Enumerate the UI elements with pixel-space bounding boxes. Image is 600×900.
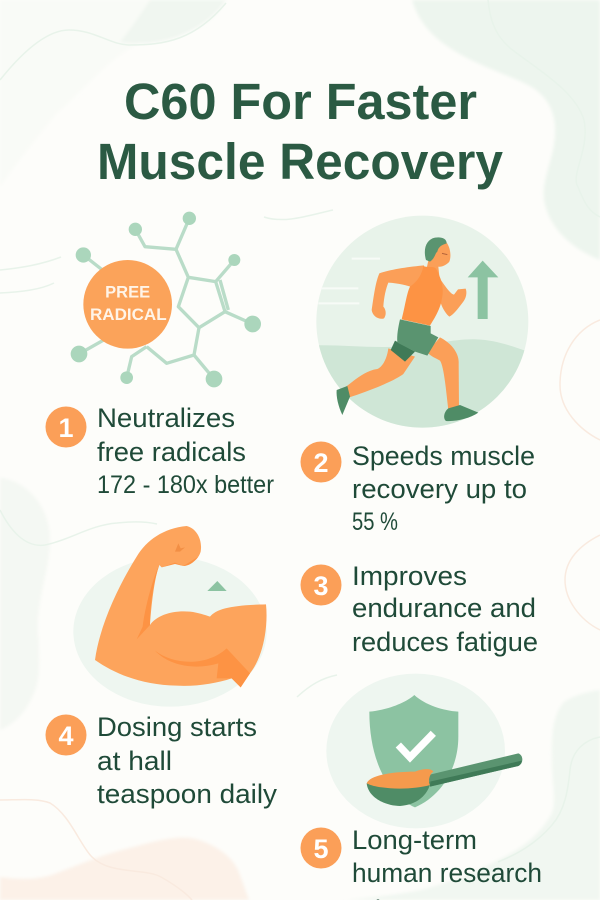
item 4: dosing: at hall [97, 746, 172, 776]
item 1: neutralizes free radicals: 1 [58, 413, 74, 443]
item 3: improves endurance: 3 [313, 571, 329, 601]
title: C60 For Faster [124, 73, 477, 130]
item 1: neutralizes free radicals: 172 - 180x better [97, 471, 274, 499]
item 3: improves endurance: reduces fatigue [352, 627, 538, 657]
title: Muscle Recovery [97, 133, 504, 190]
item 4: dosing: 4 [58, 721, 74, 751]
item 4: dosing: teaspoon daily [97, 779, 278, 809]
icon: runner [316, 216, 528, 428]
item 1: neutralizes free radicals: free radicals [97, 437, 246, 467]
icon: shield and spoon [326, 674, 522, 828]
icon: free radical molecule: PREE [105, 282, 150, 301]
item 5: long-term research: 5 [313, 834, 329, 864]
item 3: improves endurance: Improves [352, 561, 467, 591]
item 5: long-term research: human research [352, 858, 542, 888]
item 2: speeds muscle recovery: Speeds muscle [352, 441, 535, 471]
item 1: neutralizes free radicals [46, 403, 274, 499]
icon: free radical molecule [71, 212, 261, 387]
item 5: long-term research: Long-term [352, 825, 477, 855]
item 4: dosing [46, 712, 278, 809]
item 2: speeds muscle recovery: 2 [313, 448, 329, 478]
item 2: speeds muscle recovery: 55 % [352, 508, 398, 536]
icon: free radical molecule: RADICAL [90, 305, 167, 324]
title [97, 73, 504, 190]
item 2: speeds muscle recovery: recovery up to [352, 474, 527, 504]
item 4: dosing: Dosing starts [97, 712, 257, 742]
item 3: improves endurance [300, 561, 538, 657]
icon: flexed arm [73, 526, 267, 707]
item 5: long-term research [300, 825, 542, 900]
item 1: neutralizes free radicals: Neutralizes [97, 403, 235, 433]
item 2: speeds muscle recovery [300, 441, 535, 536]
item 3: improves endurance: endurance and [352, 593, 536, 623]
